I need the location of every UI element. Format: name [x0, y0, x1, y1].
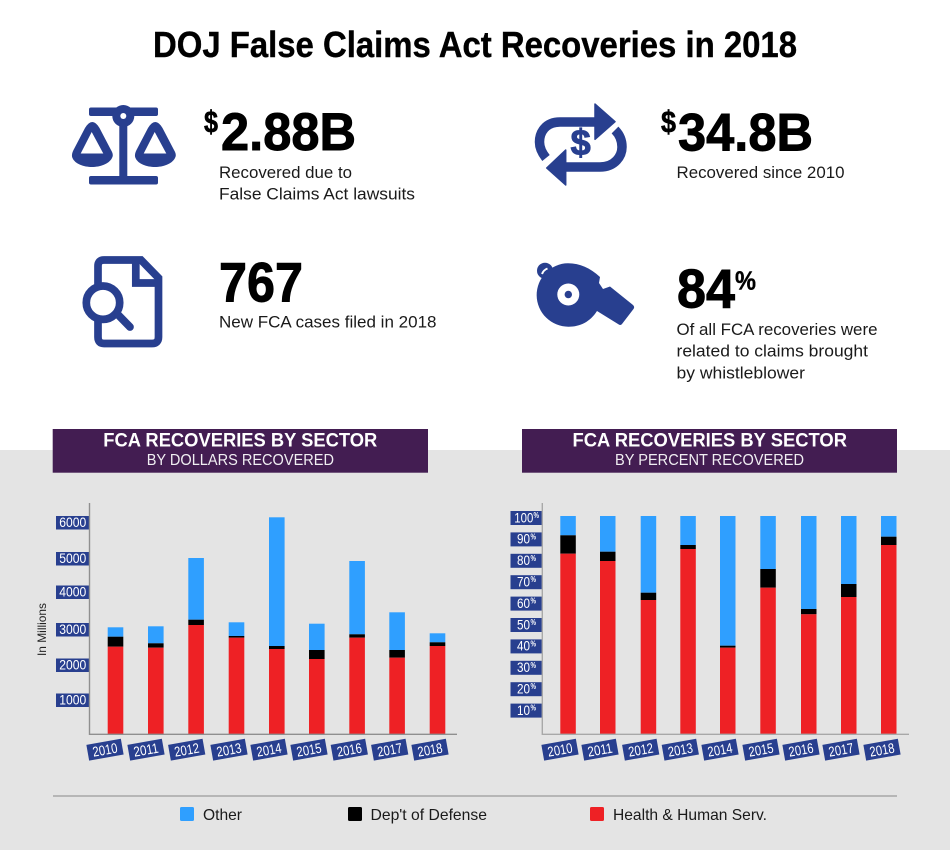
- y axis percent labels: 70: [517, 574, 530, 590]
- x axis year labels: 2015: [747, 740, 775, 760]
- y axis percent labels: %: [530, 661, 536, 670]
- legend item: other: [180, 807, 243, 824]
- x axis year labels: [86, 739, 449, 761]
- y axis labels: 1000: [59, 692, 86, 708]
- y axis labels: 4000: [59, 584, 86, 600]
- icon: balance scales: [72, 105, 176, 184]
- y axis labels: 5000: [59, 550, 86, 566]
- stat: 2.88B recovered: False Claims Act lawsuits: [219, 184, 415, 204]
- y axis percent labels: 20: [517, 680, 530, 696]
- axis label: In Millions: [35, 603, 49, 656]
- y axis percent labels: 10: [517, 702, 530, 718]
- heading: by dollars recovered: BY DOLLARS RECOVERED: [147, 452, 334, 469]
- heading: by percent recovered: FCA RECOVERIES BY SECTOR: [572, 431, 847, 452]
- stat: 84% whistleblower: 84: [677, 257, 735, 319]
- x axis year labels: 2017: [827, 740, 855, 760]
- x axis year labels: 2011: [586, 740, 614, 760]
- y axis percent labels: %: [530, 597, 536, 606]
- y axis labels: 3000: [59, 621, 86, 637]
- x axis year labels: [541, 739, 901, 761]
- icon: dollar arrows: [540, 104, 622, 185]
- x axis year labels: 2015: [295, 740, 323, 760]
- y axis percent labels: %: [530, 682, 536, 691]
- x axis year labels: 2010: [91, 740, 119, 760]
- x axis year labels: 2010: [546, 740, 574, 760]
- stacked bars 2010 to 2018: [560, 516, 896, 734]
- legend item: other: Other: [203, 807, 243, 824]
- y axis percent labels: 90: [517, 531, 530, 547]
- y axis percent labels: 50: [517, 616, 530, 632]
- stat: 2.88B recovered: [204, 103, 415, 204]
- x axis year labels: 2012: [173, 740, 201, 760]
- heading: by percent recovered: BY PERCENT RECOVERED: [615, 452, 804, 469]
- x axis year labels: 2014: [255, 740, 283, 760]
- y axis percent labels: [510, 509, 542, 718]
- bars 2010 to 2018: [108, 517, 445, 734]
- stat: 84% whistleblower: related to claims brought: [676, 342, 868, 361]
- stat: 34.8B since 2010: 34.8B: [678, 104, 813, 162]
- x axis year labels: 2016: [787, 740, 815, 760]
- icon: dollar arrows: $: [571, 122, 591, 163]
- x axis year labels: 2016: [336, 740, 363, 760]
- bar chart: percent recovered: [510, 503, 909, 761]
- y axis percent labels: %: [530, 704, 536, 713]
- stat: 34.8B since 2010: [661, 104, 844, 182]
- stat: 767 new cases: New FCA cases filed in 2018: [219, 312, 436, 332]
- stat: 34.8B since 2010: $: [661, 104, 676, 139]
- y axis percent labels: %: [530, 639, 536, 648]
- y axis percent labels: %: [530, 618, 536, 627]
- y axis percent labels: 60: [517, 595, 530, 611]
- y axis percent labels: 40: [517, 638, 530, 654]
- stat: 84% whistleblower: Of all FCA recoveries were: [676, 320, 878, 339]
- heading: by dollars recovered: [53, 429, 428, 473]
- y axis labels: [56, 514, 89, 708]
- stat: 34.8B since 2010: Recovered since 2010: [676, 163, 844, 182]
- bar chart: dollars recovered: [35, 503, 457, 761]
- x axis year labels: 2012: [627, 740, 655, 760]
- x axis year labels: 2014: [706, 740, 734, 760]
- icon: document with magnifier: [86, 260, 158, 344]
- y axis labels: 2000: [59, 656, 86, 672]
- x axis year labels: 2018: [868, 740, 896, 760]
- y axis percent labels: 100: [514, 509, 533, 525]
- y axis percent labels: 30: [517, 659, 530, 675]
- legend item: health and human services: Health & Human Serv.: [613, 807, 767, 824]
- x axis year labels: 2011: [132, 740, 160, 760]
- stat: 767 new cases: [219, 251, 436, 332]
- y axis percent labels: %: [530, 575, 536, 584]
- stat: 84% whistleblower: by whistleblower: [676, 363, 805, 382]
- stat: 767 new cases: 767: [219, 251, 303, 314]
- heading: by percent recovered: [522, 429, 897, 473]
- y axis percent labels: %: [530, 532, 536, 541]
- y axis labels: 6000: [59, 514, 86, 530]
- y axis percent labels: %: [534, 511, 539, 520]
- stat: 2.88B recovered: 2.88B: [221, 103, 356, 162]
- stat: 2.88B recovered: Recovered due to: [219, 163, 352, 182]
- stat: 2.88B recovered: $: [204, 104, 218, 139]
- title: DOJ False Claims Act Recoveries in 2018: [153, 24, 797, 65]
- legend: [180, 807, 767, 824]
- icon: whistle: [537, 263, 634, 327]
- y axis percent labels: 80: [517, 552, 530, 568]
- x axis year labels: 2013: [667, 740, 694, 760]
- y axis percent labels: %: [530, 554, 536, 563]
- stat: 84% whistleblower: %: [735, 266, 756, 296]
- x axis year labels: 2013: [215, 740, 243, 760]
- x axis year labels: 2017: [376, 740, 404, 760]
- stat: 84% whistleblower: [676, 257, 878, 382]
- legend item: department of defense: Dep't of Defense: [370, 807, 487, 824]
- heading: by dollars recovered: FCA RECOVERIES BY SECTOR: [103, 431, 378, 452]
- x axis year labels: 2018: [416, 740, 444, 760]
